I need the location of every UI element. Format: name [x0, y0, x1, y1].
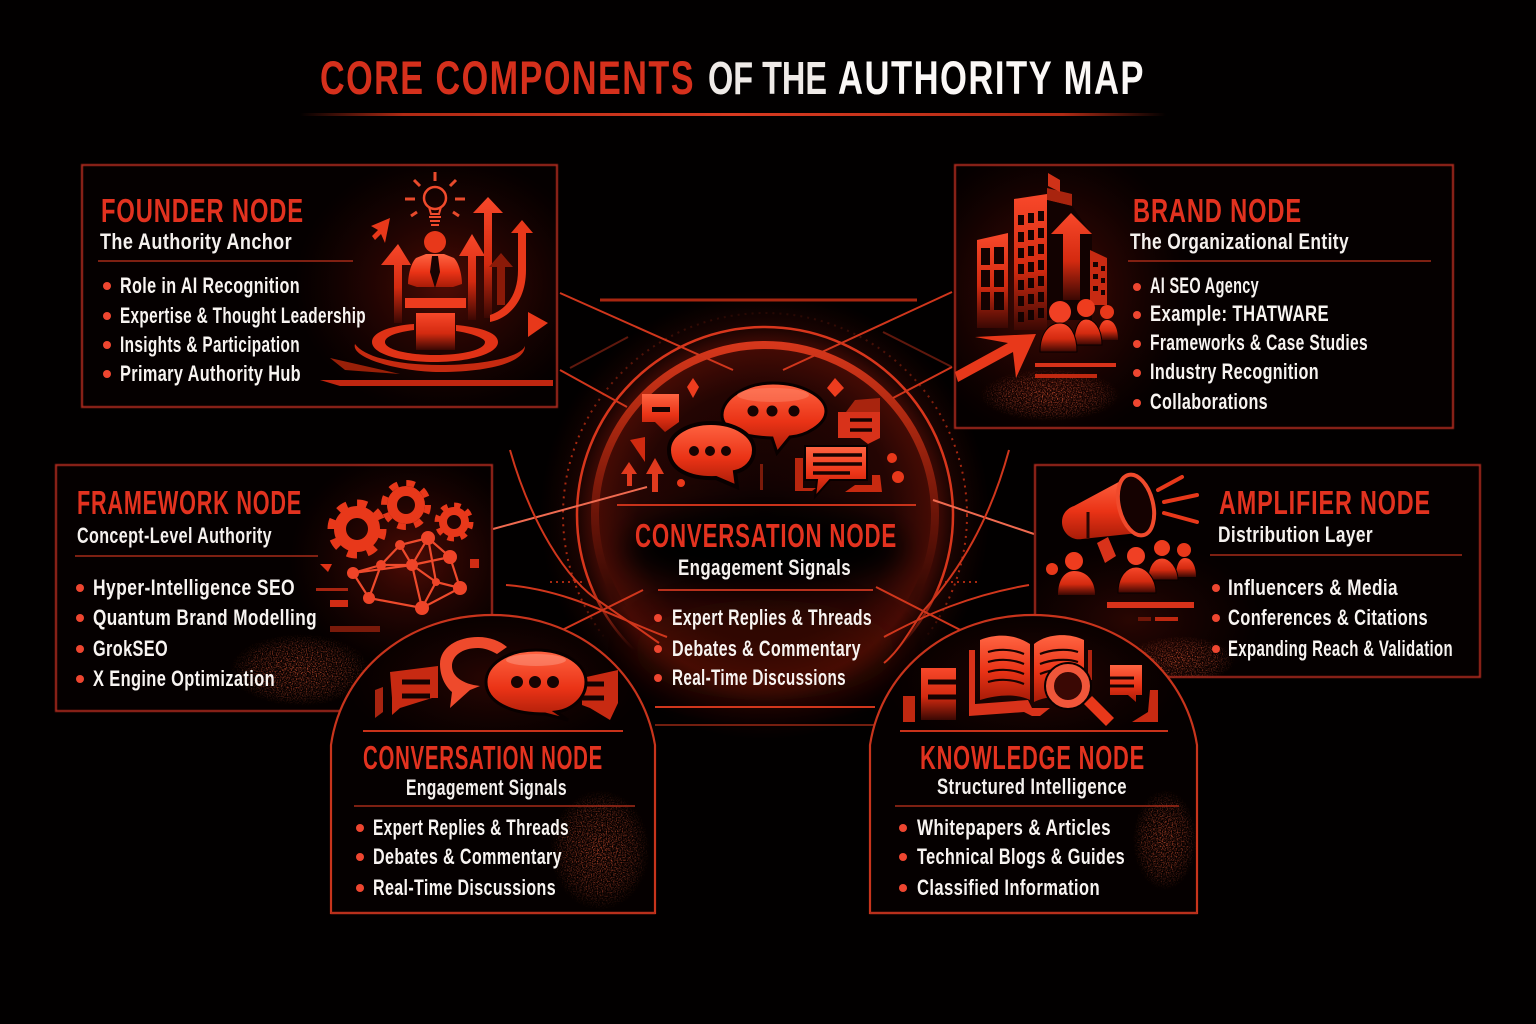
center glow	[578, 328, 952, 702]
subheading: Concept-Level Authority	[77, 523, 272, 548]
dotted side lines	[550, 581, 980, 583]
list: Quantum Brand Modelling	[93, 605, 317, 630]
outer ring	[577, 327, 953, 703]
list: Frameworks & Case Studies	[1150, 330, 1368, 355]
list: Whitepapers & Articles	[917, 815, 1111, 840]
heading: FOUNDER NODE	[101, 192, 304, 229]
list: Debates & Commentary	[373, 844, 562, 869]
heading: BRAND NODE	[1133, 192, 1302, 229]
subheading: The Organizational Entity	[1130, 229, 1349, 254]
heading: KNOWLEDGE NODE	[920, 739, 1145, 776]
list	[899, 815, 1125, 900]
list	[103, 273, 366, 386]
icon: speaker at podium with arrows and bulb	[320, 172, 553, 386]
subheading: Engagement Signals	[406, 775, 567, 800]
subheading: Structured Intelligence	[937, 774, 1127, 799]
outer haze	[540, 290, 990, 740]
icon: megaphone and audience	[1046, 471, 1197, 621]
list	[356, 815, 569, 900]
panel: knowledge node arch	[870, 605, 1197, 913]
list: Hyper-Intelligence SEO	[93, 575, 295, 600]
panel glow	[392, 628, 648, 908]
title: OF THE	[708, 52, 827, 104]
connector lines	[493, 292, 1034, 725]
title: AUTHORITY MAP	[838, 51, 1145, 104]
subheading: The Authority Anchor	[100, 229, 292, 254]
panel glow	[322, 179, 556, 392]
list: Role in AI Recognition	[120, 273, 300, 298]
list: Influencers & Media	[1228, 575, 1398, 600]
list: GrokSEO	[93, 636, 168, 661]
list: center conversation node: Expert Replies & Threads	[672, 605, 872, 630]
panel glow	[956, 167, 1165, 420]
list: center conversation node	[654, 605, 872, 690]
list: Collaborations	[1150, 389, 1268, 414]
list: center conversation node: Debates & Commentary	[672, 636, 861, 661]
heading: FRAMEWORK NODE	[77, 484, 302, 521]
heading: CONVERSATION NODE	[635, 517, 897, 554]
icon: book and magnifier	[903, 635, 1158, 726]
panel glow	[934, 628, 1196, 888]
icon: buildings, arrow and people	[955, 173, 1118, 382]
title	[300, 51, 1166, 116]
list: Technical Blogs & Guides	[917, 844, 1125, 869]
icon: speech bubbles	[375, 637, 618, 720]
list: Expert Replies & Threads	[373, 815, 569, 840]
panel: conversation node arch	[331, 605, 655, 913]
subheading: Distribution Layer	[1218, 522, 1373, 547]
subheading: Engagement Signals	[678, 555, 851, 580]
panel: brand node	[953, 163, 1455, 430]
panel: founder node	[80, 163, 559, 409]
panel: amplifier node	[1033, 463, 1482, 679]
list: Insights & Participation	[120, 332, 300, 357]
panel: framework node	[54, 463, 494, 713]
list	[76, 575, 317, 691]
list: Expertise & Thought Leadership	[120, 303, 366, 328]
heading: AMPLIFIER NODE	[1219, 484, 1431, 521]
list: Classified Information	[917, 875, 1100, 900]
list: Primary Authority Hub	[120, 361, 301, 386]
title: CORE COMPONENTS	[320, 51, 695, 104]
list: Conferences & Citations	[1228, 605, 1428, 630]
panel glow	[1042, 565, 1234, 678]
icon: speech bubbles cluster	[621, 378, 904, 497]
list: X Engine Optimization	[93, 666, 275, 691]
heading: CONVERSATION NODE	[363, 739, 603, 776]
dark interior behind text	[625, 506, 905, 590]
dotted outer ring	[563, 313, 967, 717]
list	[1212, 575, 1453, 661]
lower list haze	[635, 600, 895, 700]
panel: center conversation node	[540, 290, 990, 740]
list: center conversation node: Real-Time Discussions	[672, 665, 846, 690]
list: Example: THATWARE	[1150, 301, 1329, 326]
list	[1133, 273, 1368, 414]
list: Industry Recognition	[1150, 359, 1319, 384]
panel glow	[232, 470, 491, 704]
list: AI SEO Agency	[1150, 273, 1259, 298]
icon: gears and network	[316, 483, 479, 632]
thick ring	[595, 345, 935, 685]
list: Real-Time Discussions	[373, 875, 556, 900]
